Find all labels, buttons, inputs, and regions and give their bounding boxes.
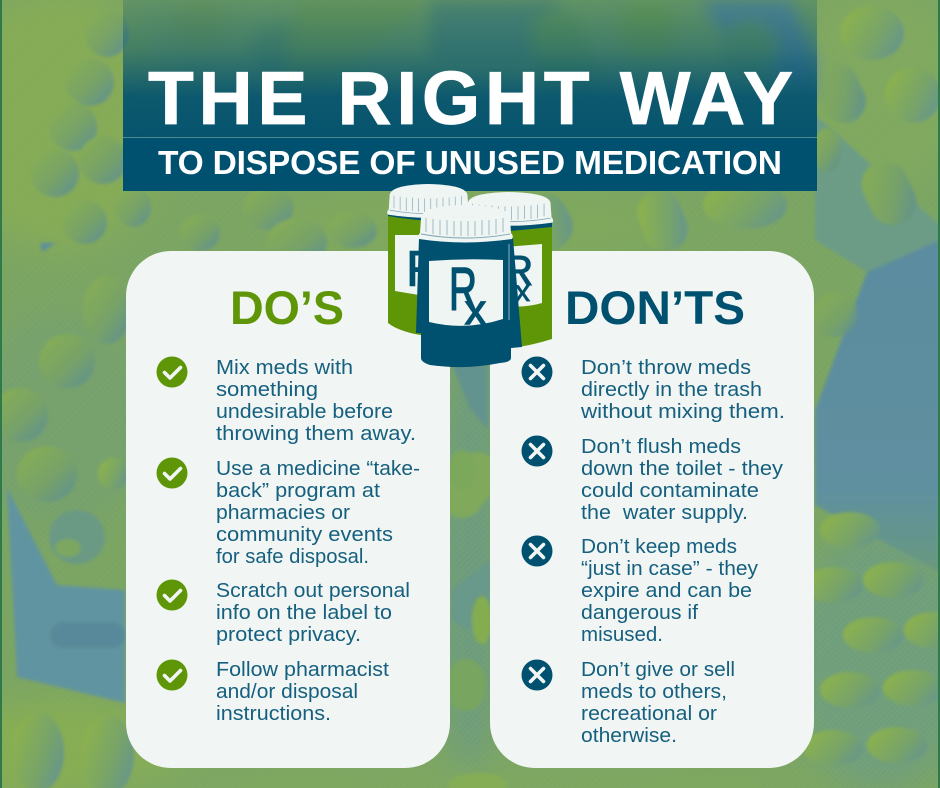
panel: do's <box>126 251 450 768</box>
text: do 4: and/or disposal <box>216 681 358 703</box>
icon: prescription bottles <box>387 184 553 367</box>
text: don't 2: could contaminate <box>581 480 759 502</box>
text: do 1 <box>216 357 416 445</box>
back right bottle <box>465 192 553 348</box>
icon: x 1 <box>522 356 552 388</box>
text: do 1: throwing them away. <box>216 423 416 445</box>
text: don't 1: directly in the trash <box>581 379 762 401</box>
text: don't 2: Don’t flush meds <box>581 436 741 458</box>
text: don't 3 <box>581 536 758 646</box>
text: don't 4: Don’t give or sell <box>581 659 735 681</box>
text: don't 3: dangerous if <box>581 602 698 624</box>
text: do 2: for safe disposal. <box>216 546 369 568</box>
back left bottle <box>387 184 470 335</box>
background under title band <box>172 0 817 105</box>
back left bottle: R <box>406 241 442 297</box>
text: don't 3: Don’t keep meds <box>581 536 737 558</box>
text: do 2: back” program at <box>216 480 380 502</box>
text: do 2 <box>216 458 420 568</box>
text: don't 2: the water supply. <box>581 502 748 524</box>
heading: don'ts: DON’TS <box>565 281 745 334</box>
back right bottle: R <box>503 247 533 294</box>
text: don't 3: “just in case” - they <box>581 558 758 580</box>
text: don't 4: meds to others, <box>581 681 727 703</box>
text: do 2: community events <box>216 524 393 546</box>
text: do 3: protect privacy. <box>216 624 361 646</box>
title: THE RIGHT WAY <box>148 56 793 140</box>
front bottle: R <box>449 256 477 323</box>
text: don't 4: recreational or <box>581 703 717 725</box>
text: don't 1: without mixing them. <box>580 401 785 423</box>
front bottle: x <box>465 286 486 333</box>
text: do 1: undesirable before <box>216 401 393 423</box>
text: do 4 <box>216 659 389 725</box>
text: do 3 <box>216 580 410 646</box>
icon: x 4 <box>522 660 552 690</box>
blue blister sheets <box>7 115 940 703</box>
text: do 4: Follow pharmacist <box>216 659 389 681</box>
edge strips <box>0 0 2 788</box>
icon: check 3 <box>156 580 188 610</box>
text: do 1: something <box>216 379 318 401</box>
text: don't 1: Don’t throw meds <box>581 357 751 379</box>
text: do 2: pharmacies or <box>216 502 350 524</box>
text: don't 2: down the toilet - they <box>581 458 783 480</box>
text: do 3: info on the label to <box>216 602 392 624</box>
text: do 3: Scratch out personal <box>216 580 410 602</box>
text: do 1: Mix meds with <box>216 357 353 379</box>
heading: do's: DO’S <box>230 281 344 334</box>
front bottle <box>416 205 522 367</box>
icon: check 4 <box>156 660 188 690</box>
text: don't 1 <box>580 357 785 423</box>
panel: don'ts <box>490 251 814 768</box>
text: don't 2 <box>581 436 783 524</box>
icon: check 1 <box>156 356 188 388</box>
icon: x 2 <box>522 436 552 466</box>
icon: x 3 <box>522 536 552 566</box>
icon: check 2 <box>156 458 188 488</box>
text: do 4: instructions. <box>216 703 331 725</box>
text: don't 4 <box>581 659 735 747</box>
text: do 2: Use a medicine “take- <box>216 458 420 480</box>
text: don't 3: misused. <box>581 624 663 646</box>
text: don't 3: expire and can be <box>581 580 752 602</box>
text: don't 4: otherwise. <box>581 725 677 747</box>
back right bottle: x <box>515 275 530 308</box>
subtitle: TO DISPOSE OF UNUSED MEDICATION <box>158 145 782 182</box>
title band <box>123 0 817 191</box>
